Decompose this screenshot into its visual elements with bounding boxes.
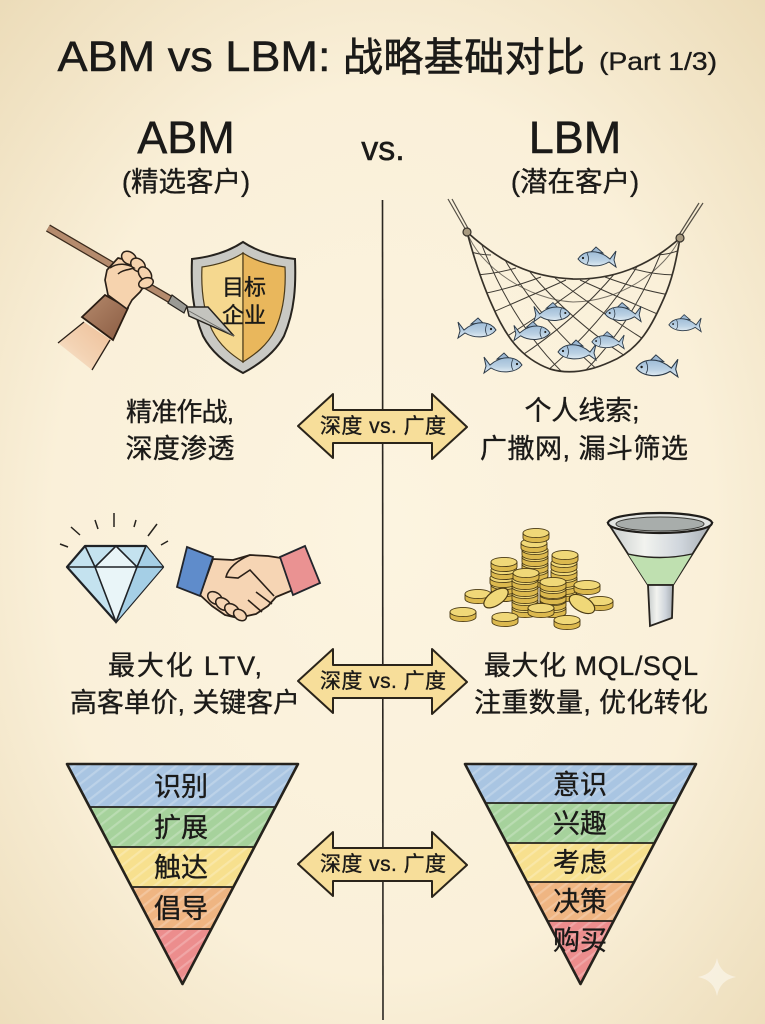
arrow: depth vs breadth row 3 (298, 832, 467, 897)
text: ABM row 1: 深度渗透 (126, 434, 234, 464)
text: LBM row 1: 个人线索; (524, 396, 640, 426)
text: ABM row 2 (70, 651, 300, 718)
icon: target shield (192, 242, 295, 373)
red cuff (280, 546, 320, 595)
center divider line (382, 200, 384, 1020)
title: (Part 1/3) (599, 48, 717, 76)
chart: ABM funnel (67, 764, 298, 984)
text: ABM row 1: 精准作战, (126, 397, 234, 427)
heading: ABM column: ABM (137, 112, 235, 163)
heading: ABM column: (精选客户) (122, 166, 250, 197)
text: LBM row 1: 广撒网, 漏斗筛选 (480, 434, 688, 464)
text: LBM row 2 (474, 651, 708, 718)
icon: fishing net with fish (448, 199, 703, 377)
icon: target shield: 目标 (222, 275, 266, 300)
chart: LBM funnel: 兴趣 (553, 809, 607, 839)
text: ABM row 1 (126, 397, 234, 464)
chart: ABM funnel: 识别 (154, 772, 208, 802)
icon: fist (105, 248, 155, 309)
chart: LBM funnel: 意识 (553, 770, 607, 800)
arrow: depth vs breadth row 1: 深度 vs. 广度 (320, 415, 446, 438)
blue cuff (177, 547, 213, 596)
chart: ABM funnel: 触达 (154, 853, 208, 883)
icon: grey funnel with green liquid (608, 513, 712, 626)
icon: target shield: 企业 (222, 303, 266, 328)
text: ABM row 2: 最大化 LTV, (108, 651, 262, 681)
heading: LBM column: LBM (529, 112, 621, 163)
arrow: depth vs breadth row 3: 深度 vs. 广度 (320, 853, 446, 876)
icon: spear and hand striking shield (48, 228, 295, 373)
icon: arm (58, 322, 111, 370)
icon: gold coins (450, 528, 613, 630)
icon: spear (48, 228, 234, 336)
net ropes (448, 199, 703, 238)
icon: sparkle watermark (698, 958, 736, 996)
hands (200, 555, 293, 618)
title: ABM vs LBM: (58, 33, 330, 81)
chart: ABM funnel: 扩展 (154, 813, 208, 843)
chart: LBM funnel (465, 764, 696, 984)
chart: ABM funnel: 倡导 (154, 894, 208, 924)
title (58, 33, 717, 81)
text: LBM row 2: 注重数量, 优化转化 (474, 688, 708, 718)
icon: handshake (177, 546, 320, 623)
arrow: depth vs breadth row 2 (298, 649, 467, 714)
heading: LBM column (511, 112, 639, 197)
arrow: depth vs breadth row 2: 深度 vs. 广度 (320, 670, 446, 693)
text: LBM row 2: 最大化 MQL/SQL (484, 651, 698, 681)
icon: sparkling diamond (60, 513, 168, 622)
net mesh (466, 232, 680, 372)
icon: leather cuff (82, 295, 128, 340)
chart: LBM funnel: 决策 (553, 887, 607, 917)
net outline (467, 232, 680, 372)
text: ABM row 2: 高客单价, 关键客户 (70, 688, 300, 718)
chart: LBM funnel: 考虑 (553, 848, 607, 878)
chart: LBM funnel: 购买 (553, 926, 607, 956)
title: 战略基础对比 (343, 36, 585, 80)
arrow: depth vs breadth row 1 (298, 394, 467, 459)
heading: ABM column (122, 112, 250, 197)
heading: vs.: vs. (361, 130, 405, 168)
heading: LBM column: (潜在客户) (511, 166, 639, 197)
text: LBM row 1 (480, 396, 688, 464)
fish (458, 247, 701, 377)
